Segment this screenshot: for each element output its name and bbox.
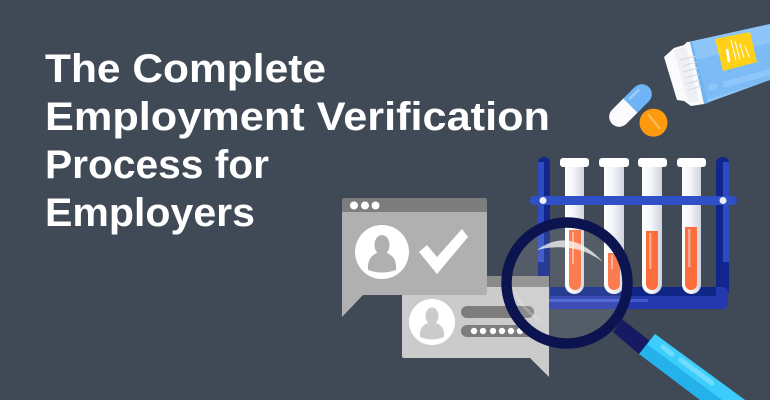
lens [511,227,623,339]
icon: magnifying glass [506,222,745,400]
title [45,47,550,235]
handle neck [613,319,651,354]
bottle label [715,32,757,71]
title: The Complete [45,47,326,91]
test tube rack [530,157,737,309]
icon: pill bottle [664,24,770,106]
title: Process for [45,143,269,187]
rack base [538,287,728,309]
rack posts [538,157,729,297]
rack crossbar [530,196,737,205]
icon: check mark [419,229,468,274]
lens ring [506,222,628,344]
handle [639,334,745,400]
chat bubble: verified user [342,198,487,317]
bottle cap [664,42,704,106]
name field [461,306,534,318]
lens highlight [537,240,603,262]
test tube 2 [599,158,629,294]
avatar [409,299,455,345]
title: Employers [45,191,255,235]
title: Employment Verification [45,95,550,139]
password field [461,325,534,337]
chat bubble: password [402,276,549,377]
icon: capsule [605,80,656,131]
test tube 4 [677,158,706,294]
test tube 3 [638,158,667,294]
test tube 1 [560,158,589,294]
window dots [350,202,380,210]
avatar [355,225,409,279]
icon: orange tablet [640,109,668,137]
